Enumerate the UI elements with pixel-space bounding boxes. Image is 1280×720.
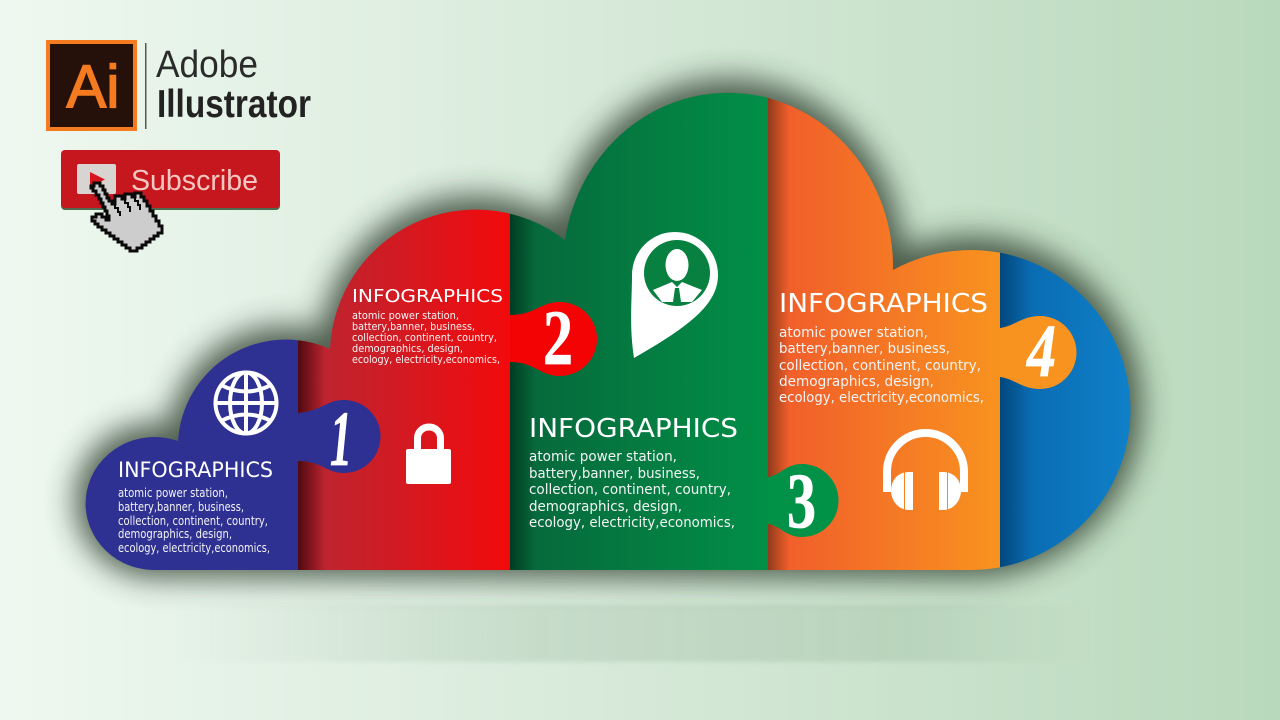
body text 3: atomic power station, [529,449,677,465]
text block 1 [118,458,273,555]
play icon [77,164,116,194]
body text 1: demographics, design, [118,527,232,541]
subscribe button [61,150,280,210]
body text 3: collection, continent, country, [529,482,731,498]
tab 4 [1000,316,1076,389]
panel 2: red segment [298,210,510,570]
body text 2: demographics, design, [352,343,463,355]
logo word Adobe: Adobe [156,44,258,86]
heading 2: INFOGRAPHICS [352,286,503,307]
icon: hand cursor [91,183,162,251]
body text 3: battery,banner, business, [529,466,700,482]
body text 1: collection, continent, country, [118,514,268,528]
body text 1: ecology, electricity,economics, [118,541,270,555]
icon: Ai badge [48,42,135,129]
panel 4: orange segment [768,80,1000,580]
icon: person pin [631,232,718,358]
panel 3: green segment [510,80,768,580]
logo divider [145,43,146,129]
tab 3 [768,464,838,537]
text block 3 [529,414,738,531]
subscribe label: Subscribe [131,165,258,197]
icon: lock [406,427,451,484]
panel 1: blue segment [86,340,298,570]
body text 4: battery,banner, business, [779,341,950,357]
body text 4 [779,325,984,406]
body text 2: collection, continent, country, [352,332,497,344]
logo word Illustrator: Illustrator [157,83,311,126]
number 2: 2 [543,294,573,381]
number 3: 3 [787,457,816,544]
body text 3 [529,449,735,531]
Adobe Illustrator logo [48,42,311,129]
body text 2: atomic power station, [352,310,459,322]
cloud drop shadow [86,90,1130,567]
body text 1: atomic power station, [118,486,228,500]
panel 5: light blue segment [1000,252,1130,568]
heading 1: INFOGRAPHICS [118,458,273,482]
body text 4: ecology, electricity,economics, [779,390,984,406]
cloud infographic [70,80,1140,580]
text block 4 [779,289,988,406]
body text 2: ecology, electricity,economics, [352,354,500,366]
tab 1 [298,400,380,473]
tab 2 [510,302,597,376]
heading 4: INFOGRAPHICS [779,289,988,319]
body text 1 [118,486,270,555]
icon: Ai badge: Ai [66,53,120,120]
body text 4: atomic power station, [779,325,928,341]
heading 3: INFOGRAPHICS [529,414,738,444]
text block 2 [352,286,503,366]
number 4: 4 [1025,310,1056,393]
body text 3: ecology, electricity,economics, [529,515,735,531]
body text 4: collection, continent, country, [779,358,981,374]
body text 2 [352,310,500,366]
body text 2: battery,banner, business, [352,321,475,333]
icon: globe [216,372,276,434]
body text 3: demographics, design, [529,499,682,515]
ground shadow [170,605,1090,662]
body text 4: demographics, design, [779,374,934,390]
icon: headphones [887,433,964,510]
body text 1: battery,banner, business, [118,500,244,514]
number 1: 1 [330,395,352,482]
